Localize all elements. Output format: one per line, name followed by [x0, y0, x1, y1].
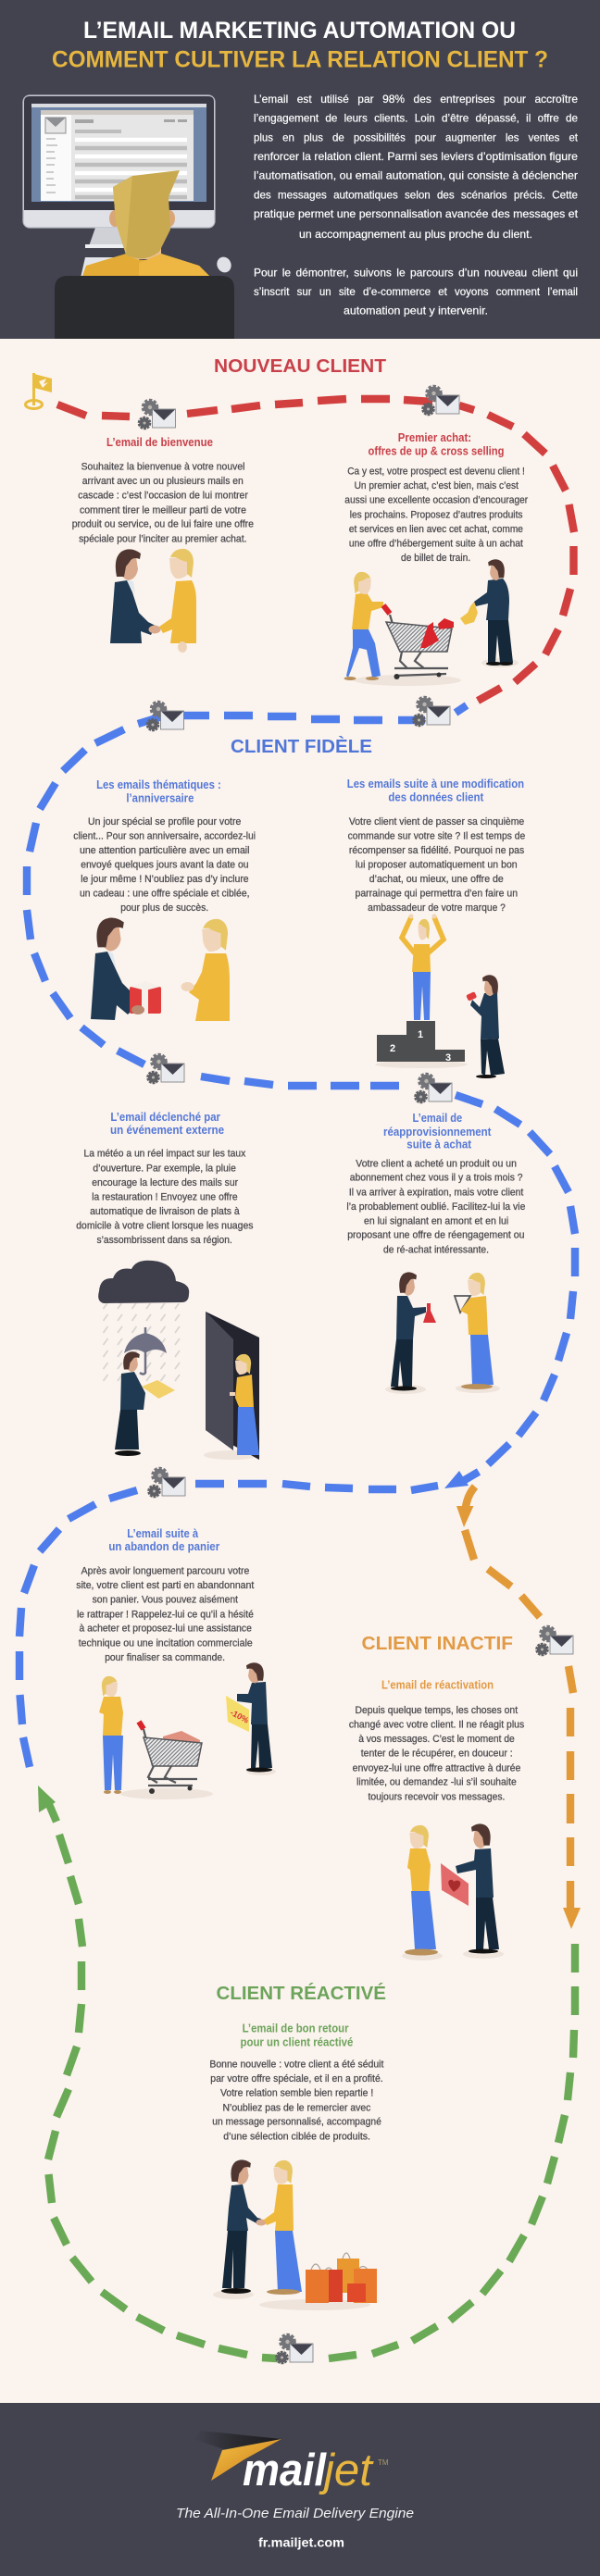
- subheading: L’email de: [413, 1112, 462, 1125]
- intro text: pratique permet une personnalisation avancée des messages et: [254, 208, 579, 220]
- body text: Après avoir longuement parcouru votre: [81, 1566, 250, 1577]
- panel: événement externe: [76, 1111, 259, 1460]
- panel: email de bienvenue: [72, 436, 254, 653]
- website url: fr.mailjet.com: [258, 2534, 344, 2549]
- body text: [72, 462, 254, 544]
- subheading: [108, 1527, 219, 1553]
- subheading: [241, 2022, 353, 2048]
- illustration: podium: [375, 915, 505, 1078]
- body text: une offre d’hébergement suite à un achat: [349, 538, 523, 549]
- body text: client... Pour son anniversaire, accordez-lui: [73, 830, 256, 841]
- body text: [73, 816, 256, 914]
- panel: réapprovisionnement: [346, 1112, 525, 1394]
- body text: la restauration ! Envoyez une offre: [92, 1191, 238, 1202]
- body text: l’a probablement oublié. Facilitez-lui la vie: [346, 1201, 525, 1213]
- logo: mailjet: jet: [319, 2445, 374, 2495]
- subheading: un événement externe: [110, 1124, 224, 1137]
- illustration: abandoned cart: -10%: [229, 1708, 250, 1725]
- intro text: l’automatisation, ou email automation, qui consiste à déclencher: [254, 170, 578, 182]
- intro text: automation peut y intervenir.: [344, 305, 488, 317]
- subheading: L’email de bienvenue: [106, 436, 213, 449]
- body text: s’assombrissent dans sa région.: [96, 1235, 232, 1246]
- intro text: un accompagnement au plus proche du client.: [299, 229, 532, 241]
- body text: Votre client a acheté un produit ou un: [356, 1158, 517, 1169]
- icon: start flag: [26, 373, 52, 409]
- body text: Un jour spécial se profile pour votre: [88, 816, 241, 828]
- illustration: podium: 1: [418, 1029, 423, 1040]
- body text: une attention particulière avec un email: [80, 845, 250, 856]
- body text: Souhaitez la bienvenue à votre nouvel: [81, 462, 244, 473]
- icon: email automation 8: [536, 1626, 573, 1655]
- body text: encourage la lecture des mails sur: [92, 1177, 239, 1188]
- illustration: rain and pizza delivery: [98, 1261, 259, 1460]
- panel: email de réactivation: [349, 1678, 524, 1960]
- body text: Votre client vient de passer sa cinquième: [349, 816, 524, 828]
- heading: client inactif: CLIENT INACTIF: [361, 1634, 513, 1654]
- body text: par votre offre spéciale, et il en a profité.: [210, 2073, 383, 2084]
- logo: mailjet: [194, 2431, 389, 2495]
- body text: de ré-achat intéressante.: [383, 1245, 489, 1256]
- illustration: heart card offer: [402, 1823, 504, 1960]
- illustration: person at computer: [23, 95, 234, 339]
- illustration: podium: 2: [390, 1043, 395, 1054]
- icon: email automation 9: [276, 2334, 313, 2363]
- body text: Un premier achat, c’est bien, mais c’est: [355, 480, 519, 492]
- body text: le rattraper ! Rappelez-lui ce qu’il a hésité: [77, 1609, 254, 1620]
- body text: technique ou une incitation commerciale: [79, 1637, 253, 1649]
- heading: client fidèle: CLIENT FIDÈLE: [231, 736, 372, 757]
- title: COMMENT CULTIVER LA RELATION CLIENT ?: [52, 46, 548, 72]
- body text: à vos messages. C’est le moment de: [358, 1734, 515, 1745]
- illustration: abandoned cart: [99, 1662, 276, 1799]
- icon: email automation 6: [415, 1074, 452, 1102]
- body text: les prochains. Proposez d’autres produits: [350, 509, 522, 520]
- arrow: blue dashed path: [19, 705, 575, 1767]
- heading: client réactivé: CLIENT RÉACTIVÉ: [217, 1983, 386, 2004]
- intro text: L’email est utilisé par 98% des entreprises pour accroître: [254, 93, 578, 106]
- body text: [348, 816, 525, 914]
- body text: [76, 1149, 254, 1246]
- intro text: Pour le démontrer, suivons le parcours d’un nouveau client qui: [254, 267, 578, 279]
- body text: à acheter et proposez-lui une assistance: [80, 1624, 252, 1635]
- header band: [0, 0, 600, 339]
- body text: le jour même ! N’oubliez pas d’y inclure: [81, 874, 249, 885]
- body text: [346, 1158, 525, 1256]
- intro text: des messages automatiques selon des scénarios précis. Cette: [254, 189, 578, 201]
- body text: ambassadeur de votre marque ?: [368, 902, 506, 914]
- illustration: podium: 3: [445, 1052, 451, 1064]
- body text: aussi une excellente occasion d’encourager: [344, 495, 529, 506]
- subheading: offres de up & cross selling: [369, 444, 504, 457]
- body text: Bonne nouvelle : votre client a été séduit: [209, 2060, 383, 2071]
- illustration: client with cart and seller: [344, 559, 519, 686]
- body text: [349, 1705, 524, 1802]
- logo: mailjet: mail: [243, 2445, 327, 2495]
- subheading: L’email suite à: [127, 1527, 199, 1540]
- body text: limitée, ou demandez -lui s’il souhaite: [356, 1777, 517, 1788]
- footer band: [0, 2403, 600, 2576]
- panel: email de bon retour: [209, 2022, 383, 2310]
- panel: premier achat: [344, 431, 529, 686]
- tagline: The All-In-One Email Delivery Engine: [176, 2506, 414, 2521]
- body text: toujours recevoir vos messages.: [369, 1791, 505, 1802]
- title: L’EMAIL MARKETING AUTOMATION OU: [83, 18, 516, 44]
- arrow: green dashed path: [38, 1786, 575, 2358]
- icon: email automation 4: [413, 697, 450, 726]
- body text: parrainage qui permettra d’en faire un: [356, 889, 518, 900]
- subheading: l’anniversaire: [126, 792, 194, 805]
- heading: nouveau client: NOUVEAU CLIENT: [214, 356, 386, 377]
- body text: La météo a un réel impact sur les taux: [83, 1149, 246, 1160]
- body text: de billet de train.: [401, 553, 470, 564]
- intro text: s’inscrit sur un site d’e-commerce et voyons comment l’email: [254, 286, 578, 298]
- body text: pour finaliser sa commande.: [105, 1652, 225, 1663]
- body text: d’une sélection ciblée de produits.: [223, 2131, 370, 2142]
- body text: son panier. Vous pouvez aisément: [93, 1595, 238, 1606]
- subheading: [347, 778, 524, 804]
- body text: automatique de livraison de plats à: [90, 1206, 240, 1217]
- subheading: L’email déclenché par: [110, 1111, 220, 1124]
- icon: email automation 2: [422, 386, 459, 415]
- body text: abonnement chez vous il y a trois mois ?: [350, 1173, 523, 1184]
- subheading: suite à achat: [406, 1139, 472, 1151]
- subheading: [383, 1112, 492, 1151]
- panel: emails thématiques: [73, 778, 256, 1021]
- subheading: réapprovisionnement: [383, 1126, 492, 1139]
- icon: email automation 5: [147, 1054, 184, 1083]
- intro text: renforcer la relation client. Parmi ses leviers d’optimisation figure: [254, 151, 578, 163]
- body text: [344, 467, 529, 564]
- subheading: des données client: [388, 791, 484, 804]
- body text: commande sur votre site ? Il est temps de: [348, 830, 525, 841]
- intro text: l’engagement de leurs clients. Loin d’être dépassé, il offre de: [254, 113, 578, 125]
- body text: [209, 2060, 383, 2142]
- icon: email automation 3: [147, 702, 183, 730]
- body text: un message personnalisé, accompagné: [212, 2117, 381, 2128]
- body text: Ca y est, votre prospect est devenu client !: [347, 467, 525, 478]
- body text: cascade : c’est l’occasion de lui montrer: [78, 491, 248, 502]
- subheading: un abandon de panier: [108, 1540, 219, 1553]
- body text: un cadeau : une offre spéciale et ciblée,: [80, 889, 250, 900]
- body text: en lui signalant en amont et en lui: [364, 1215, 508, 1226]
- body text: pour plus de succès.: [120, 902, 208, 914]
- subheading: [110, 1111, 224, 1137]
- arrow: orange dashed path: [456, 1487, 581, 1929]
- body text: changé avec votre client. Il ne réagit plus: [349, 1720, 524, 1731]
- logo: mailjet: TM: [378, 2458, 389, 2467]
- body text: site, votre client est parti en abandonnant: [76, 1580, 254, 1591]
- body text: récompenser sa fidélité. Pourquoi ne pas: [349, 845, 524, 856]
- intro text: plus en plus de possibilités pour augmenter les ventes et: [254, 131, 579, 143]
- body text: spéciale pour l’inciter au premier achat.: [79, 533, 246, 544]
- icon: email automation 1: [139, 400, 176, 429]
- body text: envoyez-lui une offre attractive à durée: [353, 1762, 521, 1773]
- subheading: Premier achat:: [398, 431, 471, 444]
- subheading: L’email de bon retour: [243, 2022, 349, 2035]
- body text: Il va arriver à expiration, mais votre client: [349, 1187, 523, 1198]
- illustration: handshake: [110, 549, 196, 653]
- body text: arrivant avec un ou plusieurs mails en: [82, 476, 244, 487]
- body text: proposant une offre de réengagement ou: [347, 1230, 525, 1241]
- panel: abandon de panier: [76, 1527, 276, 1799]
- body text: lui proposer automatiquement un bon: [356, 859, 518, 870]
- subheading: Les emails suite à une modification: [347, 778, 524, 790]
- subheading: L’email de réactivation: [381, 1678, 494, 1691]
- illustration: gift: [91, 917, 230, 1021]
- body text: et services en lien avec cet achat, comme: [349, 524, 523, 535]
- body text: d’ouverture. Par exemple, la pluie: [93, 1163, 236, 1174]
- subheading: [96, 778, 221, 805]
- body text: envoyé quelques jours avant la date ou: [81, 859, 249, 870]
- subheading: [369, 431, 504, 457]
- body text: comment tirer le meilleur parti de votre: [80, 504, 246, 516]
- title: [52, 18, 548, 72]
- body text: domicile à votre client lorsque les nuages: [76, 1221, 254, 1232]
- panel: modification des données client: [347, 778, 525, 1078]
- icon: email automation 7: [148, 1468, 185, 1497]
- illustration: handshake with shopping bags: [213, 2159, 377, 2310]
- body text: d’achat, ou mieux, une offre de: [369, 874, 504, 885]
- illustration: refill product: [385, 1272, 500, 1394]
- subheading: pour un client réactivé: [241, 2035, 353, 2048]
- body text: N’oubliez pas de le remercier avec: [222, 2102, 371, 2113]
- subheading: Les emails thématiques :: [96, 778, 221, 791]
- body text: Depuis quelque temps, les choses ont: [356, 1705, 518, 1716]
- body text: Votre relation semble bien repartie !: [220, 2088, 373, 2099]
- body text: tenter de le récupérer, en douceur :: [361, 1748, 513, 1760]
- intro text: [254, 93, 579, 317]
- arrow: red dashed path: [57, 399, 574, 701]
- body text: [76, 1566, 254, 1663]
- body text: produit ou service, ou de lui faire une offre: [72, 519, 254, 530]
